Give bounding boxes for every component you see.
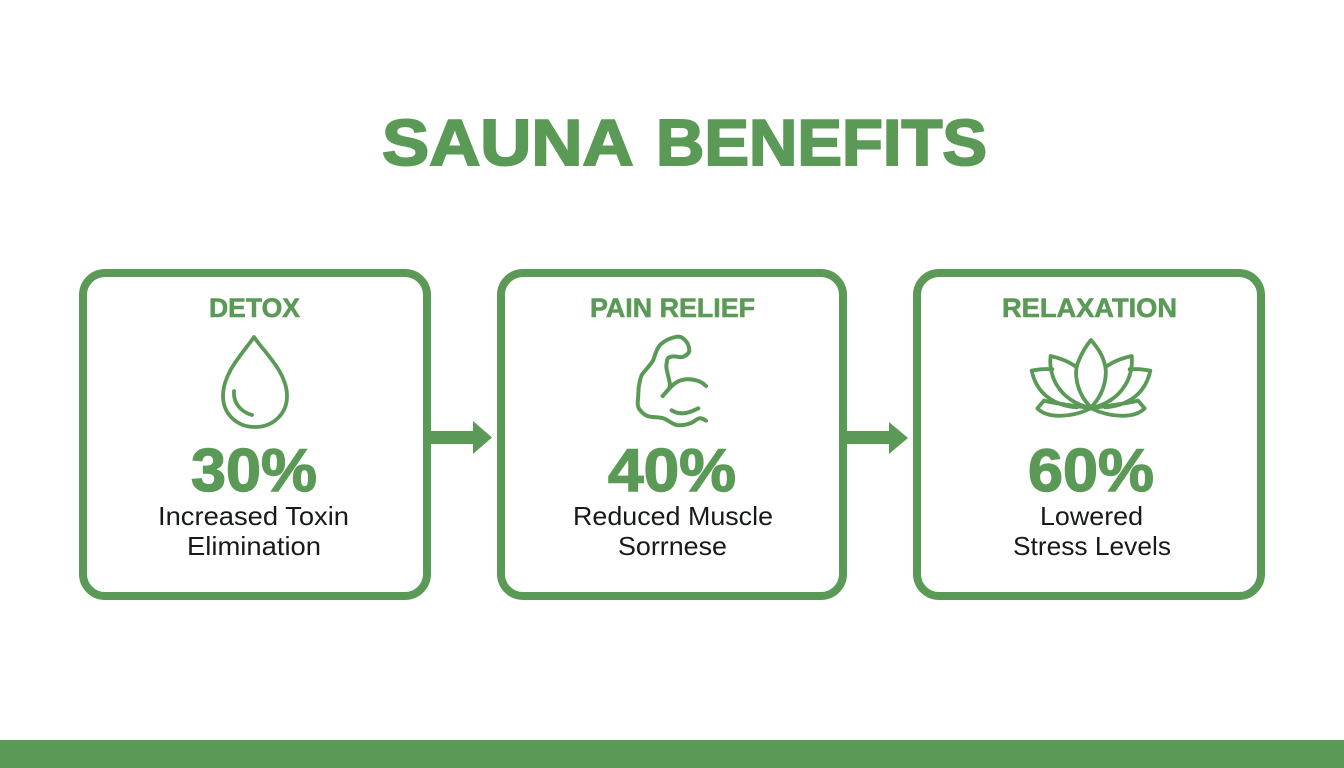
description: relaxation: Stress Levels — [1013, 531, 1171, 561]
title: BENEFITS — [656, 106, 987, 179]
stat: 30%: 30% — [191, 437, 317, 504]
icon: flexed arm muscle — [638, 337, 706, 425]
heading: relaxation: RELAXATION — [1002, 293, 1177, 323]
title: SAUNA — [382, 106, 633, 179]
arrow: detox to pain relief — [430, 421, 492, 454]
panel: detox — [83, 273, 427, 596]
icon: water drop — [223, 337, 287, 427]
arrow: pain relief to relaxation — [847, 422, 908, 454]
description: detox: Increased Toxin — [158, 501, 349, 531]
description: detox: Elimination — [187, 531, 321, 561]
icon: lotus flower — [1032, 340, 1150, 416]
heading: pain relief: PAIN RELIEF — [590, 293, 755, 323]
footer band — [0, 740, 1344, 768]
stat: 40%: 40% — [608, 437, 736, 504]
heading: detox: DETOX — [209, 293, 300, 323]
panel: relaxation — [917, 273, 1261, 596]
stat: 60%: 60% — [1028, 437, 1154, 504]
description: relaxation: Lowered — [1040, 501, 1143, 531]
panel: pain relief — [501, 273, 843, 596]
description: pain relief: Sorrnese — [618, 531, 727, 561]
description: pain relief: Reduced Muscle — [573, 501, 773, 531]
